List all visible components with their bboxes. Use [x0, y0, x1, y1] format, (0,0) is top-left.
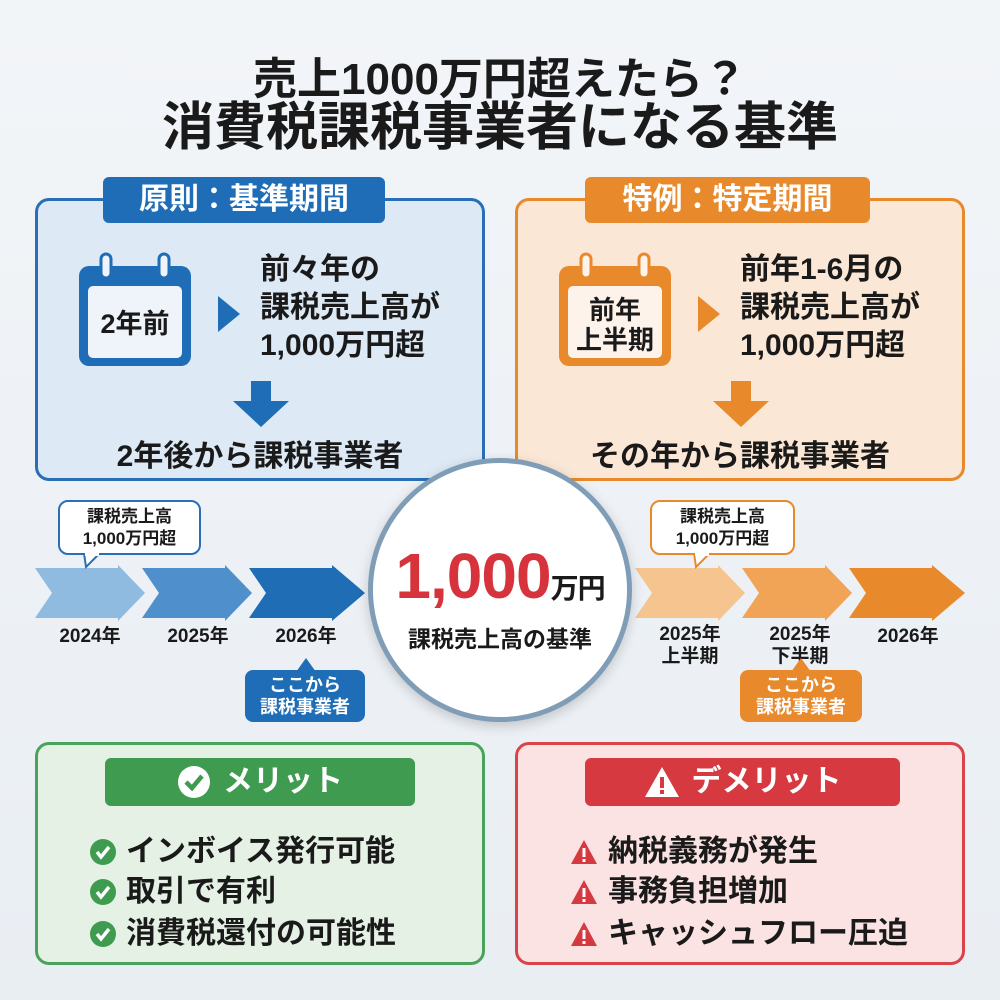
bubble: right: 課税売上高: [680, 507, 765, 526]
tab: merits: [105, 758, 415, 806]
center circle: [368, 458, 632, 722]
title: 消費税課税事業者になる基準: [162, 99, 838, 157]
bubble: left: 課税売上高: [87, 507, 172, 526]
text: 下半期: [771, 646, 828, 667]
callout: left start: 課税事業者: [260, 697, 350, 717]
text: condition: 1,000万円超: [260, 329, 425, 362]
panel: merits: 消費税還付の可能性: [126, 917, 396, 950]
bubble: left: [58, 500, 201, 555]
calendar icon: 上半期: [576, 325, 654, 355]
text: 2026年: [275, 626, 337, 647]
text: result: 2年後から課税事業者: [117, 440, 403, 473]
tab: demerits: [585, 758, 900, 806]
title: 売上1000万円超えたら？: [253, 55, 747, 104]
tab: principle: [103, 177, 385, 223]
period labels right: [659, 624, 721, 667]
panel: merits: [35, 742, 485, 965]
arrow down: [713, 381, 769, 427]
tab: merits: メリット: [223, 765, 343, 798]
panel: merits: 取引で有利: [126, 875, 276, 908]
panel: exception: [515, 198, 965, 481]
bubble: right: [650, 500, 795, 555]
text: condition: 前々年の: [260, 253, 380, 286]
text: condition: 前年1-6月の: [740, 253, 903, 286]
calendar icon: 2年前: [100, 309, 170, 339]
calendar icon: [79, 252, 191, 366]
demerit items: 納税義務が発生: [608, 835, 818, 868]
tab: demerits: デメリット: [692, 765, 842, 798]
center circle: 課税売上高の基準: [408, 626, 592, 652]
text: 2025年: [769, 624, 831, 645]
tab: exception: [585, 177, 870, 223]
calendar icon: [559, 252, 671, 366]
callout: right start: 課税事業者: [756, 697, 846, 717]
callout: left start: [245, 670, 365, 722]
text: 2026年: [877, 626, 939, 647]
text: condition: [260, 253, 440, 362]
period labels right: 2025年: [659, 624, 721, 645]
panel: demerits: [515, 742, 965, 965]
panel: demerits: 事務負担増加: [608, 875, 788, 908]
period labels right: 上半期: [661, 646, 718, 667]
center circle: 1,000万円: [395, 540, 605, 612]
callout: right start: ここから: [765, 675, 837, 695]
bubble: left: 1,000万円超: [83, 529, 176, 548]
callout: right start: [740, 670, 862, 722]
tab: exception: 特例：特定期間: [622, 183, 832, 216]
text: result: その年から課税事業者: [590, 440, 890, 473]
tab: principle: 原則：基準期間: [139, 183, 349, 216]
text: condition: 課税売上高が: [740, 291, 920, 324]
title: [162, 55, 838, 157]
arrow right: [698, 296, 720, 332]
text: condition: 1,000万円超: [740, 329, 905, 362]
callout: left start: ここから: [269, 675, 341, 695]
calendar icon: 前年: [589, 295, 641, 325]
arrow right: [218, 296, 240, 332]
timeline right arrows: [635, 565, 965, 621]
bubble: right: 1,000万円超: [676, 529, 769, 548]
year labels left: 2024年: [59, 626, 121, 647]
text: condition: 課税売上高が: [260, 291, 440, 324]
timeline left arrows: [35, 565, 365, 621]
text: 2025年: [167, 626, 229, 647]
merit items: インボイス発行可能: [126, 835, 395, 868]
arrow down: [233, 381, 289, 427]
panel: principle: [35, 198, 485, 481]
text: condition: [740, 253, 920, 362]
panel: demerits: キャッシュフロー圧迫: [608, 917, 908, 950]
